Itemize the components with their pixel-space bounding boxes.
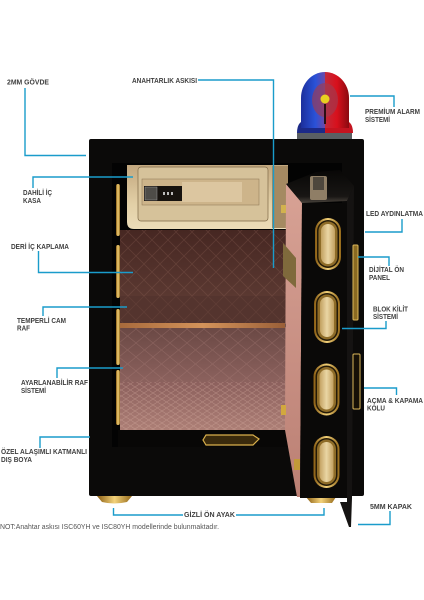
label: hidden front foot: GİZLİ ÖN AYAK xyxy=(184,510,235,519)
label: inner safe: KASA xyxy=(23,198,41,205)
label: 2mm body xyxy=(7,78,86,156)
label: tempered glass shelf: TEMPERLİ CAM xyxy=(17,317,66,325)
floor handle xyxy=(203,435,259,445)
label: digital panel xyxy=(358,257,404,282)
door black front xyxy=(300,203,347,498)
door knobs xyxy=(315,218,341,270)
door hinge upper xyxy=(281,205,286,213)
safe body xyxy=(89,139,364,496)
door thin edge xyxy=(340,186,354,527)
label: block lock xyxy=(342,306,409,328)
label: digital panel: PANEL xyxy=(369,275,391,282)
keypad xyxy=(144,186,182,201)
alarm beacon xyxy=(297,72,353,139)
label: block lock: SİSTEMİ xyxy=(373,313,398,321)
label: digital panel: DİJİTAL ÖN xyxy=(369,265,404,274)
floor lip xyxy=(118,430,290,447)
label: 2mm body: 2MM GÖVDE xyxy=(7,78,49,86)
label: open close handle: KOLU xyxy=(367,406,385,412)
gold shelf rails xyxy=(116,184,120,425)
footnote: NOT:Anahtar askısı ISC60YH ve ISC80YH modellerinde bulunmaktadır. xyxy=(0,524,219,531)
label: alloy paint xyxy=(1,437,90,464)
door leather side xyxy=(285,184,302,497)
label: open close handle xyxy=(364,388,423,412)
label: inner safe xyxy=(23,177,133,205)
label: premium alarm xyxy=(350,96,420,124)
label: adjustable shelf xyxy=(21,368,123,395)
label: alloy paint: DIŞ BOYA xyxy=(1,457,32,464)
interior opening xyxy=(112,163,342,447)
label: hidden front foot xyxy=(114,508,324,519)
label: LED lighting xyxy=(365,211,423,232)
door lower hinge xyxy=(294,459,300,470)
open door xyxy=(281,170,360,527)
label: key hanger: ANAHTARLIK ASKISI xyxy=(132,78,197,85)
safe illustration xyxy=(89,72,364,527)
interior floor xyxy=(120,382,288,430)
label: key hanger xyxy=(132,78,274,268)
label: 5mm door: 5MM KAPAK xyxy=(370,504,412,511)
inner safe xyxy=(127,165,288,229)
back wall upper xyxy=(120,230,288,296)
door handle lower xyxy=(353,354,360,409)
door bracket xyxy=(283,243,296,288)
label: block lock: BLOK KİLİT xyxy=(373,306,409,314)
label: 5mm door xyxy=(358,504,412,524)
foot: left xyxy=(97,496,132,504)
label: alloy paint: ÖZEL ALAŞIMLI KATMANLI xyxy=(1,447,87,456)
glass shelf xyxy=(120,323,285,328)
label: tempered glass shelf xyxy=(17,307,127,332)
foot: right xyxy=(306,497,336,503)
label: leather lining xyxy=(11,243,133,272)
label: leather lining: DERİ İÇ KAPLAMA xyxy=(11,243,69,251)
back wall lower xyxy=(120,327,288,383)
label: adjustable shelf: SİSTEMİ xyxy=(21,387,46,395)
door handle upper xyxy=(353,245,358,320)
hinge post xyxy=(310,176,327,200)
label: premium alarm: PREMİUM ALARM xyxy=(365,108,420,116)
shelf zone wall xyxy=(120,296,288,324)
door top face xyxy=(286,170,354,203)
label: adjustable shelf: AYARLANABİLİR RAF xyxy=(21,379,89,387)
label: premium alarm: SİSTEMİ xyxy=(365,116,390,124)
label: inner safe: DAHİLİ İÇ xyxy=(23,189,52,197)
door hinge lower xyxy=(281,405,286,415)
label: tempered glass shelf: RAF xyxy=(17,326,31,332)
